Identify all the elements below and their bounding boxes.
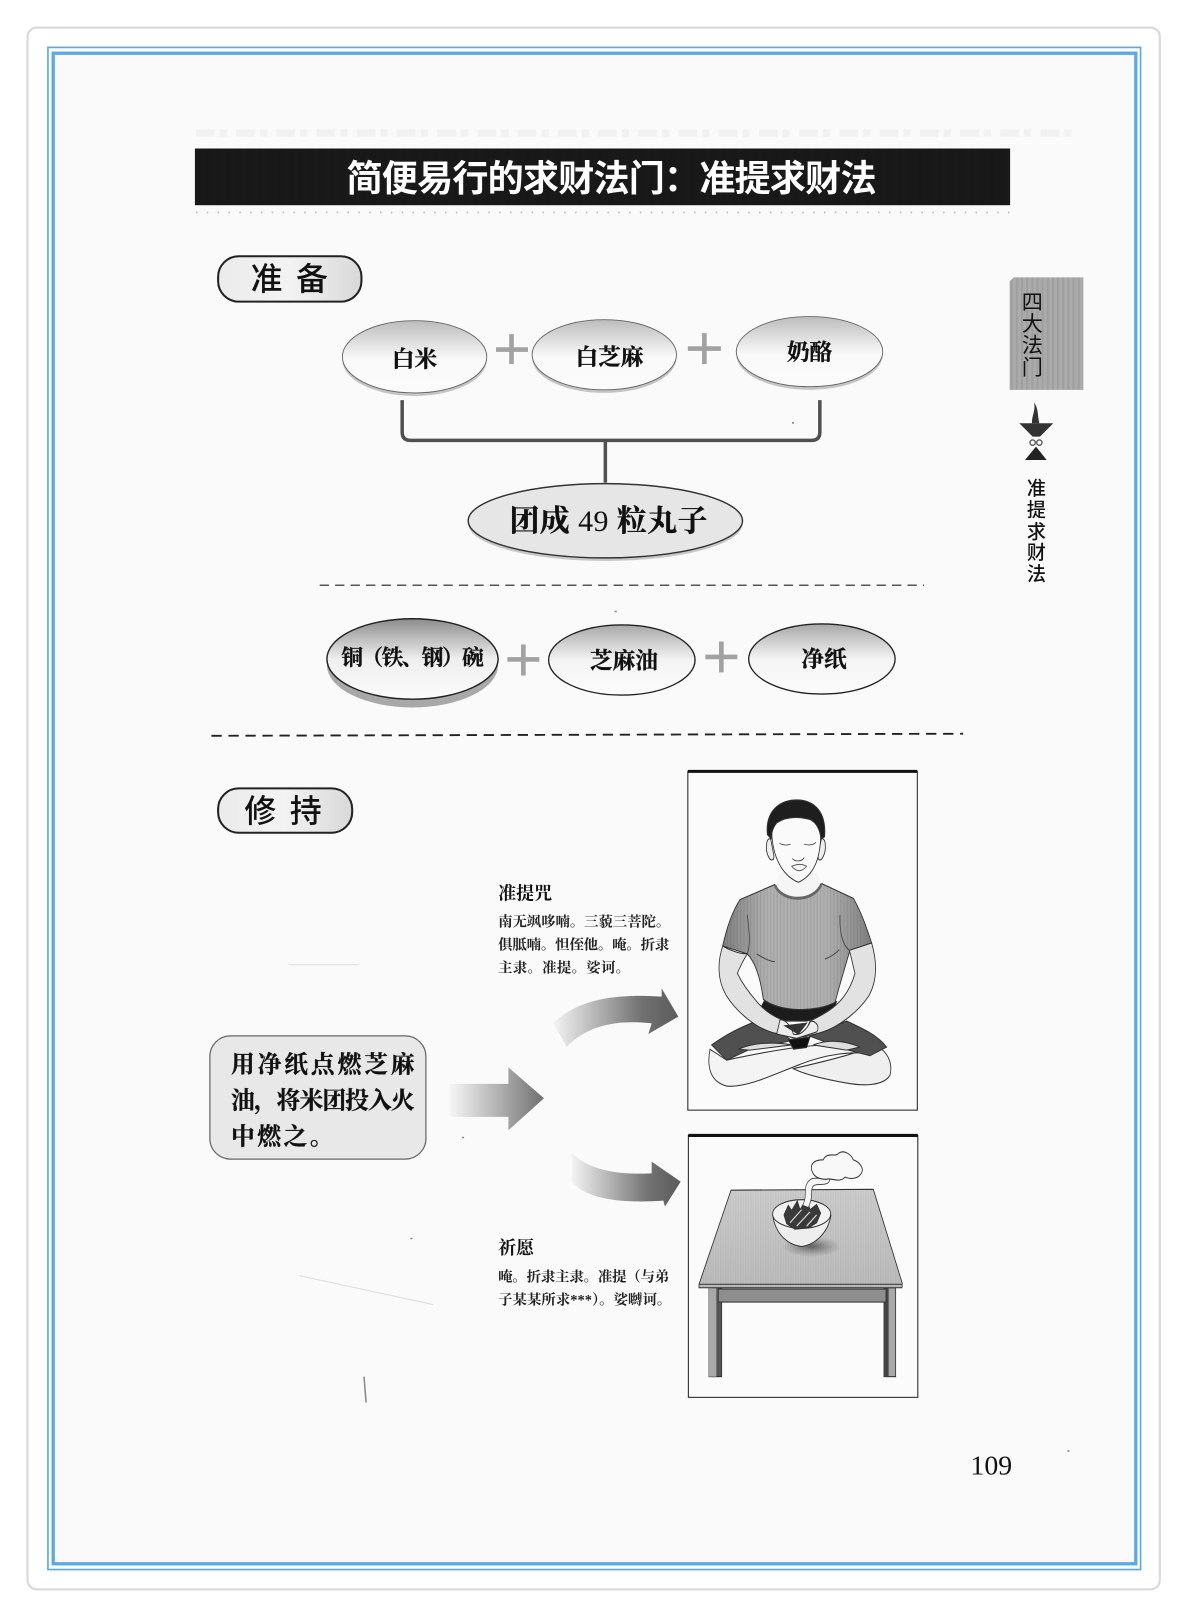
mantra text: 准提咒: 南无飒哆喃。三藐三菩陀。 — [498, 913, 670, 931]
plus — [688, 333, 721, 364]
oval: 铜（铁、钢）碗: 铜（铁、钢）碗 — [341, 646, 484, 670]
mantra text: 准提咒: 俱胝喃。怛侄他。唵。折隶 — [498, 935, 670, 953]
text box: instruction — [210, 1036, 426, 1159]
arrow: straight — [450, 1067, 544, 1130]
title bar — [195, 148, 1010, 205]
plus — [507, 645, 539, 675]
oval: 团成49粒丸子: 团成 49 粒丸子 — [509, 505, 707, 538]
heading pill: 修持 — [218, 788, 352, 833]
arrow: curved up — [553, 988, 678, 1047]
figure — [709, 800, 891, 1086]
oval: 白芝麻 — [532, 320, 676, 393]
text box: instruction: 用净纸点燃芝麻 — [231, 1051, 415, 1079]
icon: oil lamp — [1019, 403, 1053, 460]
oval: 芝麻油 — [549, 625, 695, 695]
side tab: 四大法门: 四大法门 — [1022, 291, 1043, 379]
connector lines — [402, 400, 820, 483]
table and bowl — [699, 1152, 902, 1377]
side tab: 四大法门 — [1010, 277, 1083, 390]
oval: 净纸 — [749, 624, 895, 694]
panel: table with burning bowl — [688, 1135, 918, 1397]
mantra text: 祈愿 — [498, 1238, 671, 1309]
plus — [496, 334, 528, 364]
oval: 白米 — [342, 321, 487, 396]
heading pill: 修持: 修持 — [244, 793, 322, 829]
text box: instruction: 中燃之。 — [231, 1124, 336, 1151]
oval: 芝麻油: 芝麻油 — [590, 648, 658, 673]
mantra text: 祈愿: 唵。折隶主隶。准提（与弟 — [498, 1267, 669, 1285]
panel: meditating figure — [688, 771, 917, 1110]
oval: 白米: 白米 — [392, 347, 438, 372]
side label: 准提求财法: 准提求财法 — [1027, 478, 1046, 586]
page number: 109 — [970, 1451, 1012, 1482]
heading pill: 准备 — [218, 256, 361, 302]
dashed divider — [320, 584, 924, 586]
oval: 铜（铁、钢）碗 — [327, 619, 498, 707]
oval: 奶酪 — [736, 317, 883, 390]
mantra text: 准提咒 — [498, 882, 670, 976]
mantra text: 祈愿: 子某某所求***）。娑嚩诃。 — [498, 1291, 671, 1309]
oval: 净纸: 净纸 — [801, 647, 847, 672]
text box: instruction: 油，将米团投入火 — [231, 1088, 415, 1115]
dashed divider — [211, 734, 963, 736]
faint scan ghost line — [196, 130, 1072, 137]
mantra text: 准提咒: 主隶。准提。娑诃。 — [498, 958, 630, 976]
heading pill: 准备: 准备 — [251, 261, 328, 297]
arrow: curved down — [572, 1153, 681, 1207]
plus — [705, 641, 737, 672]
title: 简便易行的求财法门：准提求财法 — [346, 158, 877, 199]
mantra text: 祈愿: 祈愿 — [498, 1238, 535, 1258]
mantra text: 准提咒: 准提咒 — [498, 882, 552, 903]
oval: 奶酪: 奶酪 — [787, 340, 833, 365]
oval: 白芝麻: 白芝麻 — [575, 345, 644, 370]
oval: 团成49粒丸子 — [468, 484, 742, 561]
